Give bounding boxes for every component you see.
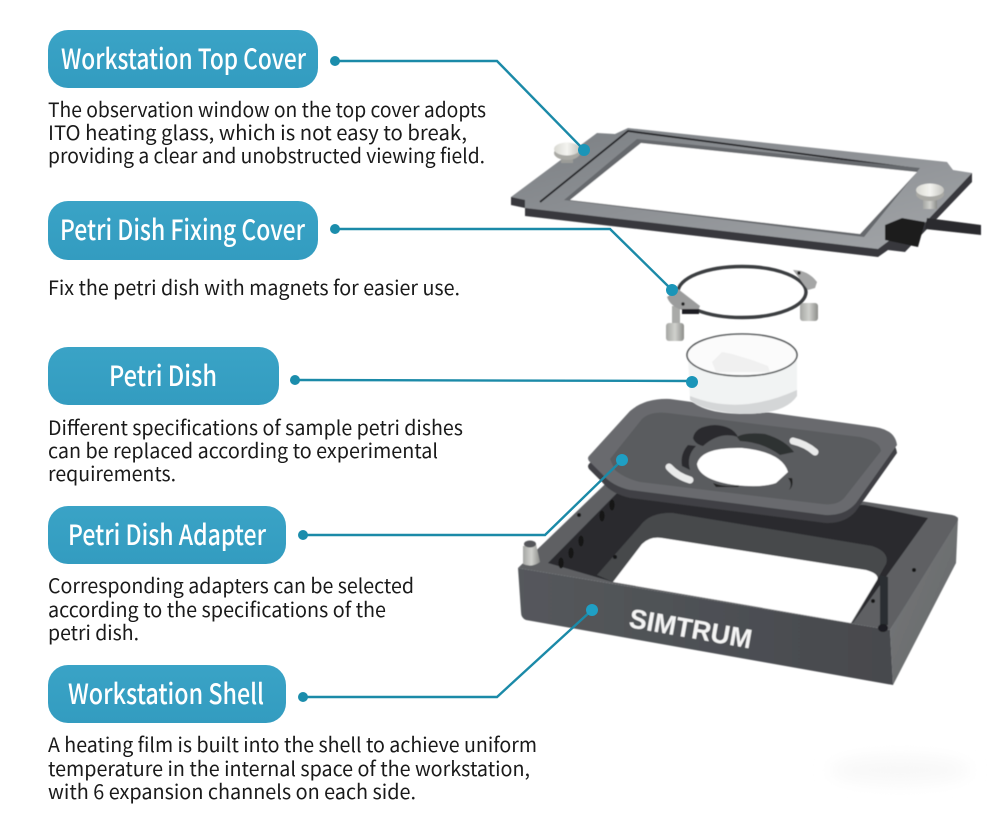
shell connector post left: [523, 544, 540, 566]
shell right face: [890, 517, 958, 685]
shell post right: [880, 575, 888, 625]
product illustration: petri dish: [687, 334, 797, 414]
heading pill: [48, 506, 286, 564]
adapter central opening: [697, 448, 788, 486]
section: petri dish fixing cover: [48, 201, 460, 301]
top cover right knob: [916, 184, 944, 209]
top cover window: [570, 143, 917, 234]
top cover groove: [540, 131, 917, 202]
description: providing a clear and unobstructed viewing field.: [48, 140, 485, 169]
top cover window frame: [564, 139, 920, 237]
description: A heating film is built into the shell to achieve uniform: [48, 729, 537, 758]
description: [48, 94, 486, 169]
heading pill: Workstation Top Cover: [61, 38, 306, 78]
heading pill: Petri Dish: [109, 355, 217, 395]
connector: workstation shell: [298, 604, 598, 702]
description: temperature in the internal space of the workstation,: [48, 753, 530, 782]
description: [48, 570, 414, 646]
heading pill: Petri Dish Adapter: [68, 514, 266, 554]
description: can be replaced according to experimental: [48, 435, 438, 464]
description: Corresponding adapters can be selected: [48, 570, 414, 599]
description: [48, 729, 537, 805]
fixing cover tabs: [667, 289, 700, 311]
heading pill: [48, 201, 318, 260]
section: petri dish adapter: [48, 506, 414, 646]
heading pill: [48, 665, 286, 723]
description: according to the specifications of the: [48, 594, 386, 623]
top cover connector and cable: [885, 218, 925, 247]
heading pill: Workstation Shell: [68, 673, 264, 713]
connector: workstation top cover: [330, 56, 590, 156]
description: Fix the petri dish with magnets for easier use.: [48, 272, 460, 301]
fixing cover screws: [672, 306, 680, 324]
section: petri dish: [48, 347, 463, 487]
shell screw holes: [558, 500, 916, 603]
shell inner walls: [548, 490, 928, 623]
adapter recess: [610, 413, 881, 504]
product illustration: petri dish fixing cover: [666, 266, 818, 341]
adapter top: [588, 399, 897, 515]
top cover side edge: [511, 173, 972, 257]
section: workstation shell: [48, 665, 537, 805]
description: [48, 412, 463, 487]
description: requirements.: [48, 458, 176, 487]
shell central opening: [613, 538, 878, 623]
top cover face: [511, 128, 972, 249]
connector: petri dish fixing cover: [330, 224, 678, 296]
dish rim: [687, 334, 797, 376]
adapter edge: [588, 407, 897, 523]
shell inner ledge: [597, 513, 887, 623]
top cover left knob: [554, 142, 580, 163]
product illustration: workstation top cover: [511, 128, 981, 257]
heading pill: Petri Dish Fixing Cover: [60, 209, 305, 249]
adapter slots: [693, 425, 738, 446]
connector: petri dish adapter: [298, 454, 628, 540]
description: with 6 expansion channels on each side.: [48, 776, 416, 805]
description: ITO heating glass, which is not easy to break,: [48, 117, 467, 146]
product illustration: workstation shell: [518, 465, 958, 685]
dish body: [688, 356, 797, 414]
adapter white slots: [793, 441, 815, 452]
description: Different specifications of sample petri dishes: [48, 412, 463, 441]
description: petri dish.: [48, 617, 139, 646]
section: workstation top cover: [48, 30, 486, 169]
shell top face: [518, 465, 958, 630]
connector: petri dish: [290, 375, 698, 388]
shadow smudge under the shell: [830, 756, 970, 784]
shell front face: [518, 568, 893, 685]
fixing cover ring: [678, 266, 806, 318]
heading pill: [48, 30, 318, 88]
heading pill: [48, 347, 279, 405]
product illustration: petri dish adapter: [588, 399, 897, 523]
brand logo: SIMTRUM: [627, 603, 754, 654]
description: The observation window on the top cover adopts: [48, 94, 486, 123]
